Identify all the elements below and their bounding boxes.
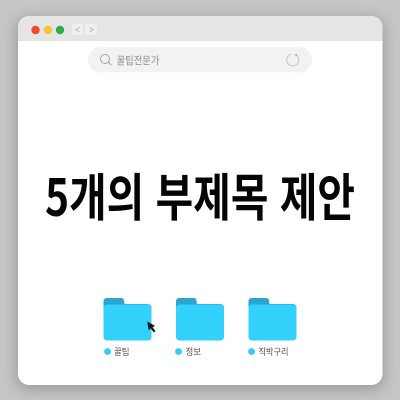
label: 직박구리 <box>258 347 288 357</box>
title bar <box>18 16 383 41</box>
folder: 직박구리 <box>248 298 296 357</box>
icon: loading spinner <box>287 54 299 66</box>
icon: cursor arrow <box>147 322 156 332</box>
label: 정보 <box>186 347 201 357</box>
back and forward buttons <box>72 24 97 35</box>
folder: 꿀팁 <box>104 298 156 357</box>
search bar <box>88 47 312 72</box>
folder: 정보 <box>175 298 224 357</box>
window control buttons <box>31 26 64 34</box>
icon: magnifier <box>100 54 112 65</box>
label: 꿀팁 <box>114 346 130 357</box>
search text: 꿀팁전문가 <box>116 55 160 67</box>
